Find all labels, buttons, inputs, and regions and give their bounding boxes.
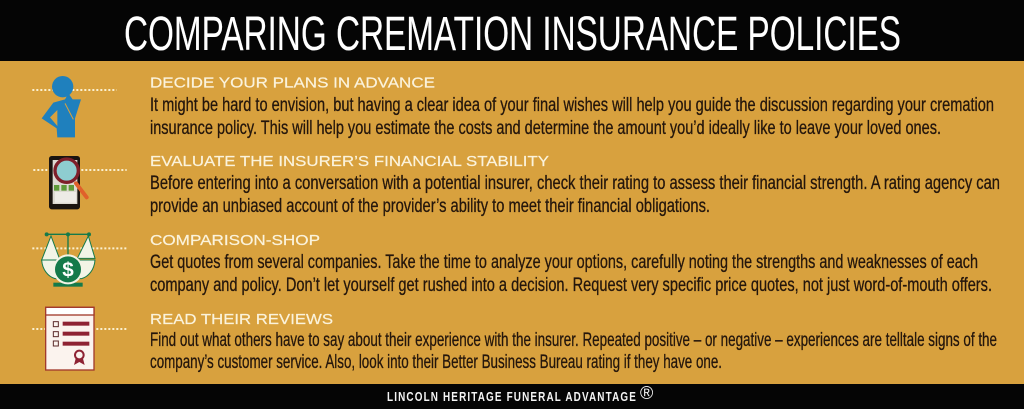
heading: decide your plans: DECIDE YOUR PLANS IN ADVANCE — [150, 74, 435, 92]
heading: read their reviews: READ THEIR REVIEWS — [150, 311, 333, 328]
heading: evaluate: EVALUATE THE INSURER’S FINANCIAL STABILITY — [150, 153, 549, 170]
heading: comparison-shop: COMPARISON-SHOP — [150, 232, 320, 249]
body text: decide your plans — [150, 94, 994, 139]
section 1 — [150, 74, 994, 139]
icon: thinking person — [32, 76, 117, 137]
icon: scales with dollar: $ — [62, 259, 74, 282]
body text: comparison-shop — [150, 251, 992, 296]
body text: evaluate: provide an unbiased account of the provider’s ability to meet their financial obligations. — [150, 195, 710, 217]
section 4 — [150, 311, 997, 373]
body text: read their reviews: company’s customer service. Also, look into their Better Business Bureau rating if they have one. — [150, 351, 722, 373]
footer banner — [0, 383, 1024, 409]
icon: scales with dollar — [32, 232, 127, 287]
icon: phone with magnifier — [33, 156, 127, 209]
section 3 — [150, 232, 992, 296]
body text: read their reviews — [150, 329, 997, 373]
footer brand text: LINCOLN HERITAGE FUNERAL ADVANTAGE — [387, 389, 637, 404]
registered mark: ® — [640, 383, 653, 403]
icon: review document — [32, 307, 127, 370]
body text: evaluate — [150, 172, 1000, 217]
section 2 — [150, 153, 1000, 217]
title banner — [0, 0, 1024, 61]
